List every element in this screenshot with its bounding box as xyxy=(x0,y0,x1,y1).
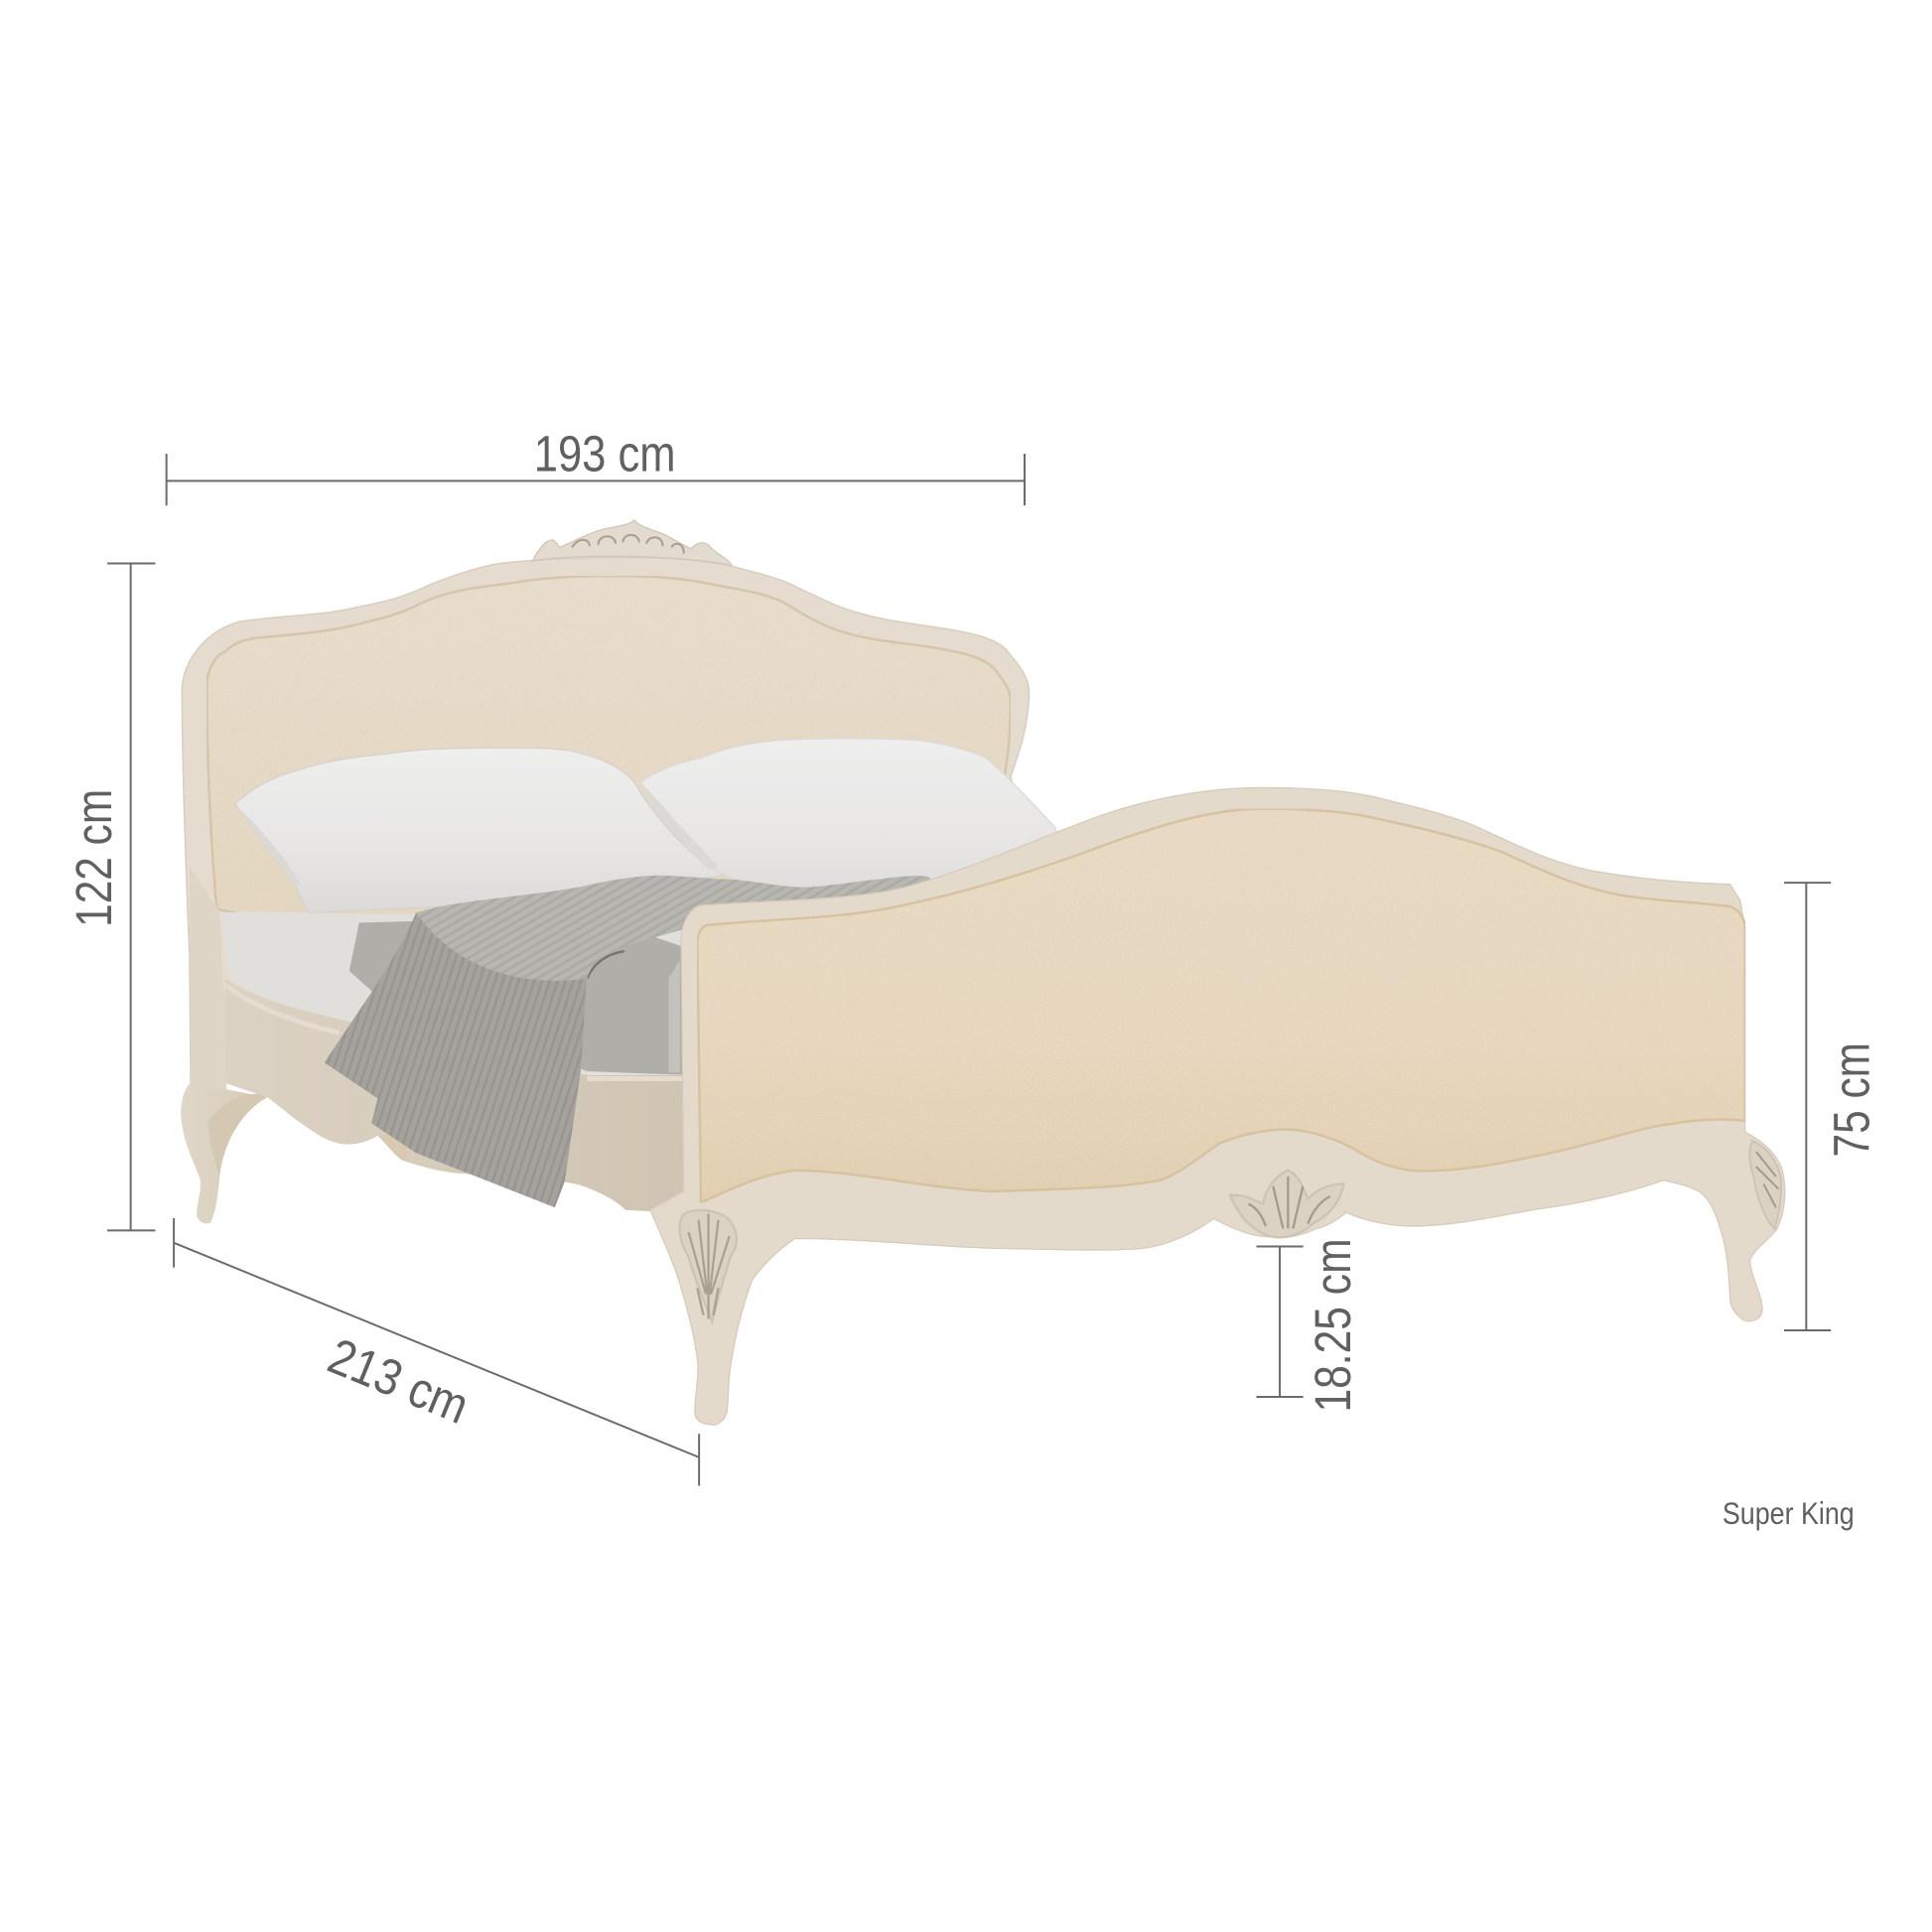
dimension: length 213 cm: 213 cm xyxy=(321,1327,477,1435)
headboard upholstery xyxy=(207,576,1011,941)
dimension: height 122 cm: 122 cm xyxy=(66,789,122,927)
left foot carving xyxy=(680,1210,737,1321)
right pillow xyxy=(640,739,1065,910)
headboard frame xyxy=(182,557,1035,1090)
dimension: width 193 cm xyxy=(167,425,1025,505)
side rail xyxy=(223,978,694,1214)
footboard frame xyxy=(650,787,1785,1425)
throw blanket xyxy=(325,876,941,1207)
left leg xyxy=(181,1082,267,1223)
sheet side fold xyxy=(669,960,680,1072)
right foot carving xyxy=(1749,1141,1781,1228)
mattress sheet xyxy=(220,912,694,1075)
dimension: footboard height 75 cm xyxy=(1784,883,1880,1330)
bed illustration xyxy=(181,520,1785,1425)
dimension: width 193 cm: 193 cm xyxy=(534,425,676,482)
size caption: Super King xyxy=(1723,1496,1855,1531)
dimension: clearance 18.25 cm: 18.25 cm xyxy=(1305,1238,1361,1413)
inner leg shade xyxy=(208,1094,267,1176)
dimension: length 213 cm xyxy=(174,1218,699,1485)
head post xyxy=(190,867,226,1090)
dimension: clearance 18.25 cm xyxy=(1256,1238,1361,1413)
left pillow xyxy=(235,748,724,912)
dimension: height 122 cm xyxy=(66,564,155,1230)
footboard upholstery xyxy=(697,809,1745,1202)
rail moulding xyxy=(223,983,684,1079)
pillow flange and seams xyxy=(235,787,719,887)
centre apron carving xyxy=(1230,1171,1343,1237)
grey fitted sheet xyxy=(349,916,685,1075)
sheet shadow edge xyxy=(587,951,624,978)
apron ornament xyxy=(377,1133,408,1161)
dimension: footboard height 75 cm: 75 cm xyxy=(1824,1042,1880,1157)
crest carving xyxy=(532,520,732,566)
